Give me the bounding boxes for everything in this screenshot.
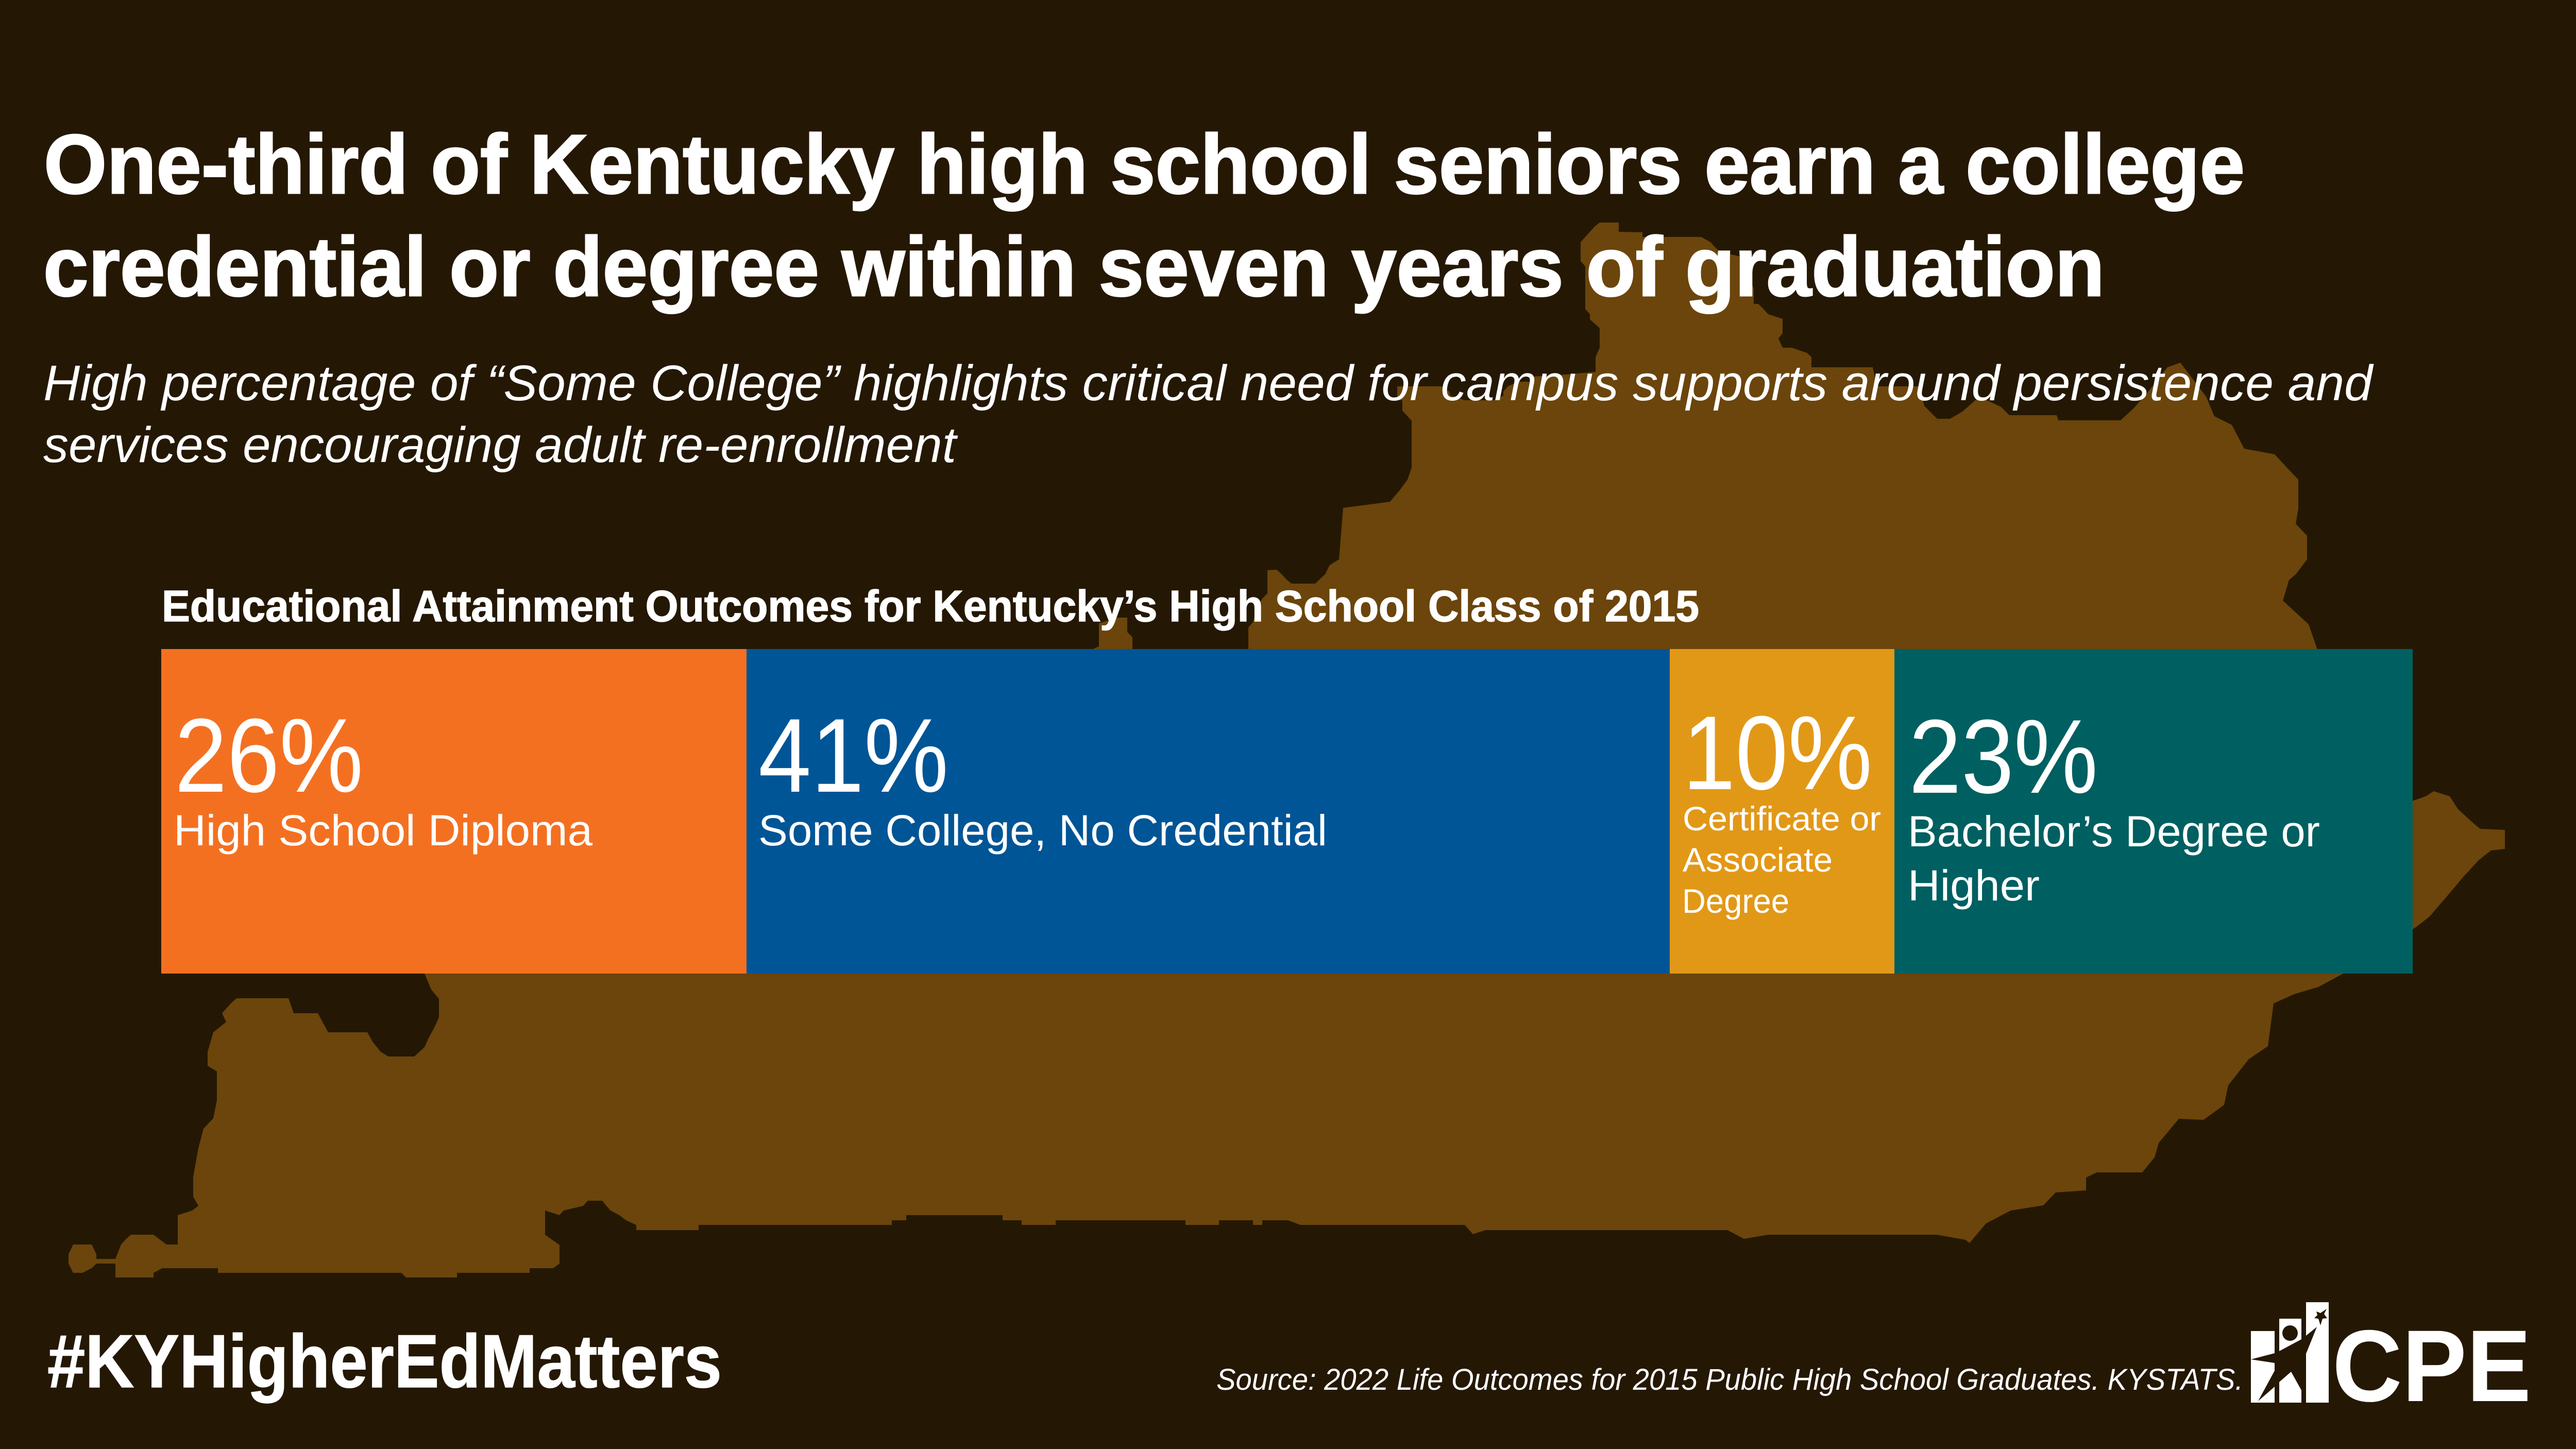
- map: Kentucky silhouette: [69, 223, 2505, 1277]
- subtitle: High percentage of “Some College” highlights critical need for campus supports around persistence and: [43, 355, 2374, 411]
- logo: CPE: [2251, 1302, 2531, 1423]
- chart title: Educational Attainment Outcomes for Kentucky’s High School Class of 2015: [162, 582, 1699, 631]
- segment: high school diploma 26%: High School Diploma: [174, 806, 592, 855]
- source note: Source: 2022 Life Outcomes for 2015 Public High School Graduates. KYSTATS.: [1216, 1363, 2243, 1396]
- logo wordmark: CPE: [2332, 1309, 2531, 1423]
- segment: bachelor's 23%: [1894, 649, 2413, 974]
- stacked bar chart: [161, 649, 2413, 974]
- segment: certificate or associate 10%: Degree: [1682, 882, 1789, 920]
- segment: certificate or associate 10%: Associate: [1683, 841, 1833, 879]
- segment: some college 41%: [747, 649, 1670, 974]
- segment: bachelor's 23%: Higher: [1908, 861, 2040, 910]
- title: credential or degree within seven years of graduation: [43, 219, 2105, 314]
- segment: certificate or associate 10%: Certificate or: [1683, 799, 1881, 838]
- subtitle: [43, 355, 2374, 473]
- segment: bachelor's 23%: 23%: [1909, 698, 2098, 815]
- icon: figure reaching for star: [2251, 1302, 2329, 1403]
- segment: high school diploma 26%: 26%: [175, 697, 363, 814]
- segment: some college 41%: Some College, No Credential: [758, 806, 1327, 855]
- subtitle: services encouraging adult re-enrollment: [43, 417, 958, 473]
- hashtag: #KYHigherEdMatters: [47, 1319, 722, 1403]
- segment: high school diploma 26%: [161, 649, 747, 974]
- segment: certificate or associate 10%: [1670, 649, 1894, 974]
- segment: bachelor's 23%: Bachelor’s Degree or: [1908, 807, 2320, 856]
- title: [43, 117, 2245, 314]
- segment: some college 41%: 41%: [758, 697, 948, 814]
- segment: certificate or associate 10%: 10%: [1683, 694, 1872, 812]
- title: One-third of Kentucky high school seniors earn a college: [44, 117, 2245, 211]
